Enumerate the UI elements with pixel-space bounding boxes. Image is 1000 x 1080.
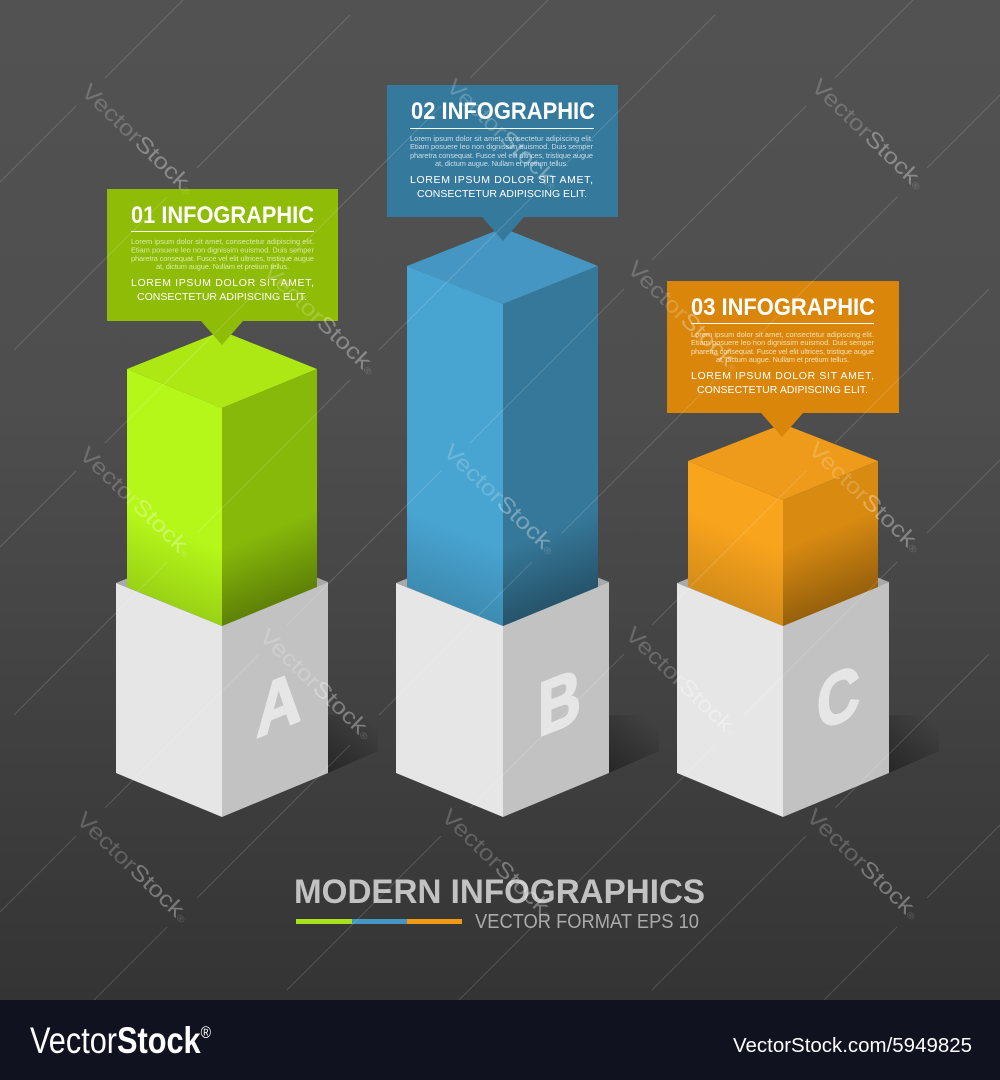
watermark text: VectorStock ®	[75, 442, 199, 563]
callout 01	[107, 189, 338, 345]
tricolour rule	[296, 919, 462, 924]
subheading 01	[131, 277, 314, 303]
watermark text	[72, 74, 931, 928]
footer bar	[0, 1000, 1000, 1080]
body text 02: Etiam posuere leo non dignissim euismod. Duis semper	[410, 142, 594, 151]
subtitle: VECTOR FORMAT EPS 10	[475, 911, 699, 933]
footer logo: VectorStock	[30, 1020, 218, 1061]
callout 03	[667, 281, 899, 437]
callout 02	[387, 85, 618, 241]
letter C: C	[817, 649, 860, 747]
column B: blue bar on white pedestal	[396, 228, 659, 817]
body text 01: at, dictum augue. Nullam et pretium tellus.	[156, 262, 289, 271]
letter B: B	[538, 651, 581, 753]
watermark text: VectorStock ®	[802, 804, 926, 925]
body text 01: Etiam posuere leo non dignissim euismod. Duis semper	[131, 246, 315, 254]
letter A: A	[256, 655, 301, 754]
body text 02: pharetra consequat. Fusce vel elit ultrices, tristique augue	[410, 151, 593, 160]
subheading 01: CONSECTETUR ADIPISCING ELIT.	[137, 291, 307, 303]
pedestal C	[677, 540, 939, 817]
subheading 02: LOREM IPSUM DOLOR SIT AMET,	[410, 174, 593, 186]
body text 02: at, dictum augue. Nullam et pretium tellus.	[435, 159, 568, 168]
heading 03: 03 INFOGRAPHIC	[691, 294, 875, 321]
subheading 02: CONSECTETUR ADIPISCING ELIT.	[417, 188, 587, 200]
watermark text: VectorStock ®	[259, 259, 383, 380]
footer logo: ®	[201, 1023, 211, 1042]
body text 03: Etiam posuere leo non dignissim euismod. Duis semper	[691, 338, 875, 347]
body text 01	[131, 237, 315, 271]
body text 02	[410, 134, 594, 168]
subheading 03: CONSECTETUR ADIPISCING ELIT.	[697, 384, 868, 396]
column C: orange bar on white pedestal	[677, 424, 939, 817]
watermark text: VectorStock ®	[437, 804, 561, 925]
bar A	[127, 331, 317, 626]
watermark text: VectorStock ®	[623, 256, 747, 377]
body text 03: pharetra consequat. Fusce vel elit ultrices, tristique augue	[691, 347, 874, 356]
footer url: VectorStock.com/5949825	[733, 1035, 972, 1057]
body text 03	[691, 330, 875, 364]
subheading 03	[691, 370, 874, 396]
column A: lime bar on white pedestal	[116, 331, 378, 817]
main title: MODERN INFOGRAPHICS	[294, 873, 705, 911]
watermark text: VectorStock ®	[621, 622, 745, 743]
watermark text: VectorStock ®	[442, 74, 566, 195]
subheading 02	[410, 174, 593, 200]
subheading 03: LOREM IPSUM DOLOR SIT AMET,	[691, 370, 874, 382]
watermark text: VectorStock ®	[255, 624, 379, 745]
body text 03: Lorem ipsum dolor sit amet, consectetur adipiscing elit.	[691, 330, 874, 339]
heading 02: 02 INFOGRAPHIC	[411, 98, 595, 125]
pedestal A	[116, 540, 378, 817]
watermark text: VectorStock ®	[77, 79, 201, 200]
pedestal B	[396, 540, 659, 817]
watermark text: VectorStock ®	[807, 74, 931, 195]
watermark text: VectorStock ®	[439, 439, 563, 560]
body text 01: Lorem ipsum dolor sit amet, consectetur adipiscing elit.	[131, 237, 314, 246]
heading 01: 01 INFOGRAPHIC	[131, 202, 314, 229]
body text 03: at, dictum augue. Nullam et pretium tellus.	[716, 355, 849, 364]
bar C	[688, 424, 878, 626]
body text 01: pharetra consequat. Fusce vel elit ultrices, tristique augue	[131, 254, 314, 263]
watermark text: VectorStock ®	[804, 437, 928, 558]
body text 02: Lorem ipsum dolor sit amet, consectetur adipiscing elit.	[410, 134, 593, 143]
subheading 01: LOREM IPSUM DOLOR SIT AMET,	[131, 277, 314, 289]
bar B	[407, 228, 598, 626]
watermark text: VectorStock ®	[72, 807, 196, 928]
